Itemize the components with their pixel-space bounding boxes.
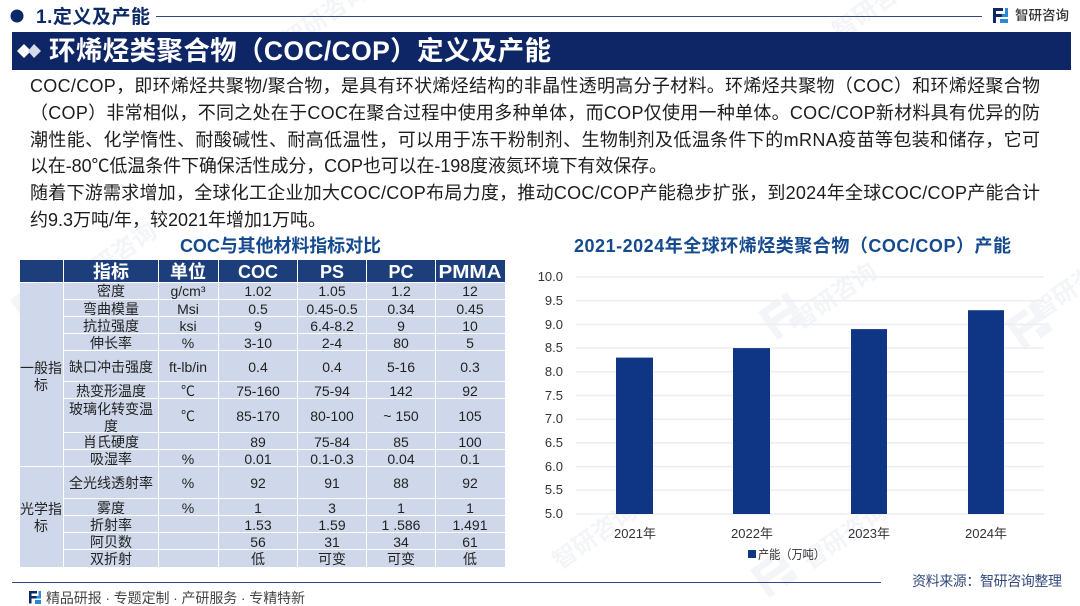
y axis labels: 8.0 (545, 364, 563, 379)
table body: 吸湿率 (90, 451, 132, 467)
y axis labels: 6.0 (545, 459, 563, 474)
section heading: 1.定义及产能 (36, 5, 150, 28)
table body: 低 (463, 551, 477, 567)
x axis labels: 2022年 (731, 526, 773, 541)
body text: 以在-80℃低温条件下确保活性成分，COP也可以在-198度液氮环境下有效保存。 (30, 156, 667, 176)
body text: （COP）非常相似，不同之处在于COC在聚合过程中使用多种单体，而COP仅使用一种单体。COC/COP新材料具有优异的防 (30, 103, 1040, 123)
legend: 产能（万吨） (758, 548, 825, 562)
x axis labels: 2024年 (965, 526, 1007, 541)
table body: 92 (250, 475, 266, 491)
source note: 资料来源：智研咨询整理 (912, 573, 1062, 589)
table body: 双折射 (90, 551, 132, 567)
table header row: 单位 (170, 261, 206, 282)
y axis labels: 7.5 (545, 388, 563, 403)
table body: % (182, 500, 194, 516)
table body: 1 .586 (382, 517, 421, 533)
table body: 12 (462, 283, 478, 299)
body text: 约9.3万吨/年，较2021年增加1万吨。 (30, 210, 326, 230)
table body: Msi (177, 301, 199, 317)
table header row: PC (388, 262, 414, 282)
y axis labels: 9.0 (545, 317, 563, 332)
table body: 1.02 (244, 283, 272, 299)
table body: g/cm³ (170, 283, 206, 299)
text: 智研咨询 (548, 498, 642, 575)
footer: 精品研报 · 专题定制 · 产研服务 · 专精特新 (46, 590, 305, 606)
table body: 75-84 (314, 434, 350, 450)
table body: ℃ (181, 383, 195, 399)
table body: 折射率 (90, 517, 132, 533)
table body: % (182, 475, 194, 491)
table body: ℃ (181, 408, 195, 424)
table body: 1 (466, 500, 474, 516)
table body: 10 (462, 318, 478, 334)
table body: 75-94 (314, 383, 350, 399)
x axis labels (614, 526, 1007, 541)
table body: 0.34 (387, 301, 415, 317)
text: 智研咨询 (68, 218, 162, 295)
table body: 雾度 (97, 500, 125, 516)
logo: brand: 智研咨询 (1015, 7, 1069, 23)
comparison table (20, 260, 505, 567)
bars (616, 310, 1004, 514)
table body: 1 (254, 500, 262, 516)
y axis labels: 7.0 (545, 411, 563, 426)
table body: 89 (250, 434, 266, 450)
y axis labels: 10.0 (538, 269, 563, 284)
table body: 抗拉强度 (83, 318, 139, 334)
table body: 可变 (387, 551, 415, 567)
table body: 肖氏硬度 (83, 434, 139, 450)
table body: 0.01 (244, 451, 272, 467)
table body: 0.3 (460, 359, 480, 375)
table body: 1.59 (318, 517, 346, 533)
body text: 潮性能、化学惰性、耐酸碱性、耐高低温性，可以用于冻干粉制剂、生物制剂及低温条件下的mRNA疫苗等包装和储存，它可 (30, 130, 1040, 150)
table body: 91 (324, 475, 340, 491)
table body: 弯曲模量 (83, 301, 139, 317)
table body: 阿贝数 (90, 534, 132, 550)
title banner (12, 32, 1071, 70)
table body: 142 (389, 383, 413, 399)
table heading: COC与其他材料指标对比 (180, 235, 381, 256)
table body: 1.491 (452, 517, 488, 533)
table body: 105 (458, 408, 482, 424)
table body: 一般指 (20, 360, 62, 376)
table body: 低 (251, 551, 265, 567)
table body: 1 (397, 500, 405, 516)
table body: 85-170 (236, 408, 280, 424)
table body: 1.2 (391, 283, 411, 299)
table header row: 指标 (93, 261, 129, 282)
bar chart (538, 269, 1044, 562)
table body: 92 (462, 383, 478, 399)
table body: 100 (458, 434, 482, 450)
table header row: COC (238, 262, 278, 282)
table body: 度 (104, 418, 118, 434)
table body: 80 (393, 335, 409, 351)
table body: 85 (393, 434, 409, 450)
x axis labels: 2023年 (848, 526, 890, 541)
table body: 92 (462, 475, 478, 491)
table body (20, 283, 505, 567)
table body: 标 (34, 518, 48, 534)
table body: 0.4 (248, 359, 268, 375)
table body: 80-100 (310, 408, 354, 424)
body text (30, 76, 1040, 230)
table body: 3-10 (244, 335, 272, 351)
table body: 0.4 (322, 359, 342, 375)
table header row: PMMA (438, 262, 502, 282)
table body: 75-160 (236, 383, 280, 399)
table body: 标 (34, 377, 48, 393)
body text: COC/COP，即环烯烃共聚物/聚合物，是具有环状烯烃结构的非晶性透明高分子材料。环烯烃共聚物（COC）和环烯烃聚合物 (30, 76, 1040, 96)
table body: 56 (250, 534, 266, 550)
table body: 伸长率 (90, 335, 132, 351)
table body: 34 (393, 534, 409, 550)
table body: 9 (254, 318, 262, 334)
table header row: PS (320, 262, 344, 282)
y axis labels: 5.0 (545, 506, 563, 521)
body text: 随着下游需求增加，全球化工企业加大COC/COP布局力度，推动COC/COP产能稳步扩张，到2024年全球COC/COP产能合计 (30, 183, 1040, 203)
table body: ft-lb/in (169, 359, 207, 375)
logo: brand (993, 7, 1069, 23)
table body: 5-16 (387, 359, 415, 375)
y axis labels: 6.5 (545, 435, 563, 450)
table body: 0.04 (387, 451, 415, 467)
table body: 0.1-0.3 (310, 451, 354, 467)
table header row (20, 260, 505, 282)
table body: 密度 (97, 283, 125, 299)
y axis labels: 8.5 (545, 340, 563, 355)
table body: 3 (328, 500, 336, 516)
table body: 玻璃化转变温 (69, 401, 153, 417)
table body: % (182, 451, 194, 467)
text: 智研咨询 (798, 498, 892, 575)
table body: 1.05 (318, 283, 346, 299)
table body: 0.45-0.5 (306, 301, 358, 317)
table body: 31 (324, 534, 340, 550)
text: 智研咨询 (788, 258, 882, 335)
table body: 全光线透射率 (69, 475, 153, 491)
table body: 0.1 (460, 451, 480, 467)
table body: ~ 150 (383, 408, 419, 424)
table body: 0.5 (248, 301, 268, 317)
table body: ksi (179, 318, 197, 334)
title banner: 环烯烃类聚合物（COC/COP）定义及产能 (49, 36, 551, 66)
footer (12, 582, 881, 606)
y axis labels (538, 269, 563, 521)
section heading (10, 5, 982, 28)
y axis labels: 5.5 (545, 482, 563, 497)
table body: 61 (462, 534, 478, 550)
table body: 缺口冲击强度 (69, 359, 153, 375)
table body: 9 (397, 318, 405, 334)
x axis labels: 2021年 (614, 526, 656, 541)
table body: % (182, 335, 194, 351)
table body: 0.45 (456, 301, 484, 317)
table body: 2-4 (322, 335, 342, 351)
table body: 1.53 (244, 517, 272, 533)
table body: 6.4-8.2 (310, 318, 354, 334)
y axis labels: 9.5 (545, 293, 563, 308)
chart title: 2021-2024年全球环烯烃类聚合物（COC/COP）产能 (574, 235, 1011, 256)
table body: 热变形温度 (76, 383, 146, 399)
table body: 可变 (318, 551, 346, 567)
table body: 光学指 (20, 501, 62, 517)
table body: 5 (466, 335, 474, 351)
table body: 88 (393, 475, 409, 491)
